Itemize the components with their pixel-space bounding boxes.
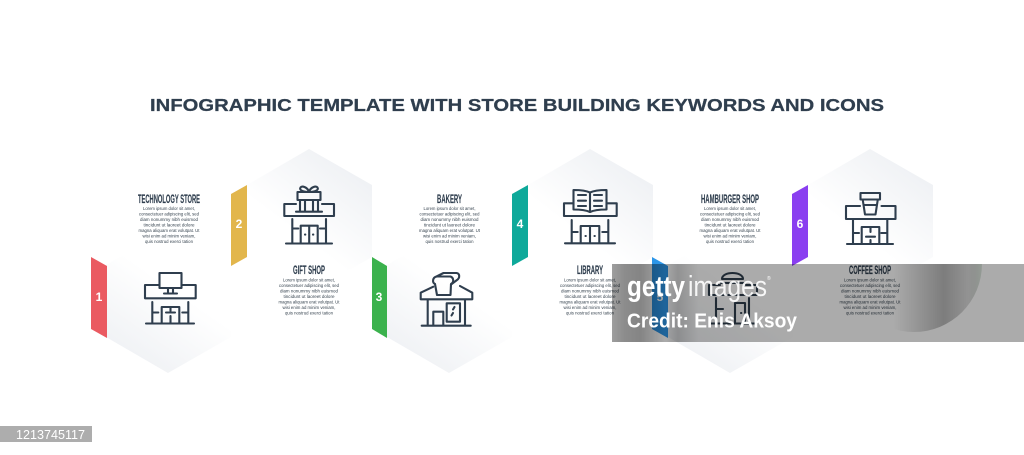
text block: technology store: Lorem ipsum dolor sit amet, [143,206,195,211]
icon: gift shop [284,187,334,244]
watermark logo: images [688,271,767,303]
text block: coffee shop: wisi enim ad minim veniam, [844,305,896,310]
text block: hamburger shop: magna aliquam erat volutpat. Ut [700,228,761,233]
watermark logo [627,271,771,303]
hexagon 2 [247,149,372,293]
text block: gift shop: diam nonummy nibh euismod [280,288,338,294]
text block: bakery: consectetuer adipiscing elit, sed [420,212,480,217]
hexagon 6 [808,149,933,293]
watermark banner [612,264,1024,342]
panel: step 1 technology store [91,194,231,373]
text block: hamburger shop: consectetuer adipiscing elit, sed [700,212,760,217]
text block: technology store: wisi enim ad minim veniam, [142,233,196,238]
text block: gift shop [278,278,340,316]
tag number: 1213745117 [16,428,85,442]
number 4: 4 [517,217,524,231]
text block: bakery: diam nonummy nibh euismod [420,217,479,222]
text block: coffee shop [840,278,901,316]
image id tag [0,426,92,442]
text block: gift shop: wisi enim ad minim veniam, [282,305,336,310]
hexagon 1 [106,229,231,373]
text block: coffee shop: diam nonummy nibh euismod [841,288,899,294]
text block: coffee shop: tincidunt ut laoreet dolore [844,294,896,299]
hexagon 3 [387,229,512,373]
hexagon 4 [528,149,653,293]
text block: library: diam nonummy nibh euismod [561,288,619,294]
text block: library: consectetuer adipiscing elit, sed [560,283,620,288]
text block: library: magna aliquam erat volutpat. Ut [560,300,621,304]
text block: library [560,278,621,316]
watermark logo: ® [767,275,771,282]
text block: coffee shop: Lorem ipsum dolor sit amet, [844,278,896,282]
heading: bakery: BAKERY [437,194,462,206]
text block: technology store [138,206,200,244]
text block: bakery: Lorem ipsum dolor sit amet, [424,206,476,211]
text block: hamburger shop: quis nostrud exerci tation [706,239,754,244]
watermark shape [846,264,982,332]
number 6: 6 [797,217,804,231]
text block: bakery: magna aliquam erat volutpat. Ut [419,228,481,233]
watermark logo: getty [627,271,685,303]
heading: hamburger shop: HAMBURGER SHOP [701,194,759,206]
panel: step 2 gift shop [231,149,372,316]
text block: library: tincidunt ut laoreet dolore [564,294,616,299]
text block: library: wisi enim ad minim veniam, [564,305,616,310]
watermark background [612,264,1024,342]
text block: bakery: tincidunt ut laoreet dolore [424,222,475,228]
text block: hamburger shop [700,206,761,244]
text block: technology store: tincidunt ut laoreet dolore [144,222,195,228]
icon: bakery [421,273,472,326]
text block: hamburger shop: Lorem ipsum dolor sit amet, [704,206,756,211]
tag background [0,426,92,442]
text block: technology store: quis nostrud exerci tation [145,239,193,244]
text block: coffee shop: magna aliquam erat volutpat. Ut [840,300,901,304]
icon: library [564,190,617,243]
ribbon 4 [512,185,528,266]
text block: technology store: consectetuer adipiscing elit, sed [139,212,199,217]
icon: hamburger shop [709,273,757,324]
number 3: 3 [376,290,383,304]
text block: technology store: diam nonummy nibh euismod [140,217,198,222]
ribbon 1 [91,257,107,338]
ribbon 3 [372,257,387,338]
text block: gift shop: Lorem ipsum dolor sit amet, [283,278,335,282]
text block: bakery: wisi enim ad minim veniam, [423,233,476,238]
text block: bakery [419,206,481,244]
number 2: 2 [236,217,243,231]
text block: bakery: quis nostrud exerci tation [426,239,474,244]
text block: gift shop: tincidunt ut laoreet dolore [284,294,335,299]
panel: step 5 hamburger shop [652,194,793,373]
heading: technology store: TECHNOLOGY STORE [138,194,200,206]
panel: step 4 library [512,149,653,316]
text block: gift shop: consectetuer adipiscing elit, sed [279,283,339,288]
panel: step 3 bakery [372,194,512,373]
text block: coffee shop: quis nostrud exerci tation [846,310,894,316]
text block: coffee shop: consectetuer adipiscing elit, sed [840,283,900,288]
heading: gift shop: GIFT SHOP [293,265,325,277]
title: INFOGRAPHIC TEMPLATE WITH STORE BUILDING KEYWORDS AND ICONS [150,95,884,115]
watermark credit: Credit: Enis Aksoy [627,310,798,332]
text block: hamburger shop: tincidunt ut laoreet dolore [704,222,756,228]
text block: gift shop: quis nostrud exerci tation [285,310,333,316]
text block: library: Lorem ipsum dolor sit amet, [564,278,616,282]
icon: technology store [145,273,196,324]
text block: library: quis nostrud exerci tation [566,310,614,316]
heading: library: LIBRARY [577,265,603,277]
ribbon 6 [792,185,808,266]
number 1: 1 [96,290,103,304]
number 5: 5 [657,290,664,304]
hexagon 5 [668,229,793,373]
ribbon 2 [231,185,247,266]
panel: step 6 coffee shop [792,149,933,316]
icon: coffee shop [846,193,896,244]
text block: hamburger shop: wisi enim ad minim veniam, [704,233,756,238]
text block: gift shop: magna aliquam erat volutpat. Ut [278,300,340,304]
text block: technology store: magna aliquam erat volutpat. Ut [138,228,200,233]
ribbon 5 [652,257,668,338]
text block: hamburger shop: diam nonummy nibh euismod [701,217,759,222]
heading: coffee shop: COFFEE SHOP [849,265,891,277]
